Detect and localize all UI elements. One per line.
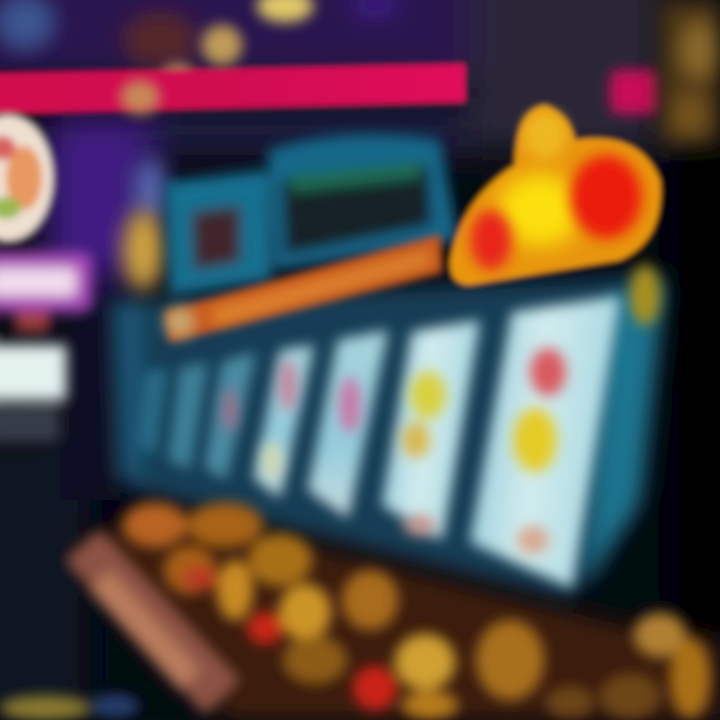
top decorations — [0, 0, 401, 68]
orange banner — [165, 235, 442, 342]
reel 7 — [138, 368, 168, 455]
gold ornament: top right — [660, 0, 720, 145]
reel symbols — [223, 348, 566, 554]
small pink sign — [610, 70, 658, 114]
prize wheel — [0, 114, 54, 242]
reel 4 — [254, 345, 314, 498]
top screens — [165, 134, 458, 295]
reel 3 — [308, 330, 388, 518]
pink neon bar — [0, 64, 465, 114]
reel 1 — [470, 296, 620, 588]
yellow and red topper — [450, 105, 660, 285]
left sign — [0, 252, 92, 442]
side lamp — [134, 158, 166, 222]
reel 2 — [382, 320, 480, 540]
coins — [0, 503, 710, 720]
reel 5 — [205, 352, 256, 480]
coin tray — [70, 505, 720, 720]
machine body — [112, 275, 665, 600]
reel 6 — [168, 362, 208, 470]
reels — [138, 296, 620, 588]
right yellow lamp — [630, 265, 660, 325]
